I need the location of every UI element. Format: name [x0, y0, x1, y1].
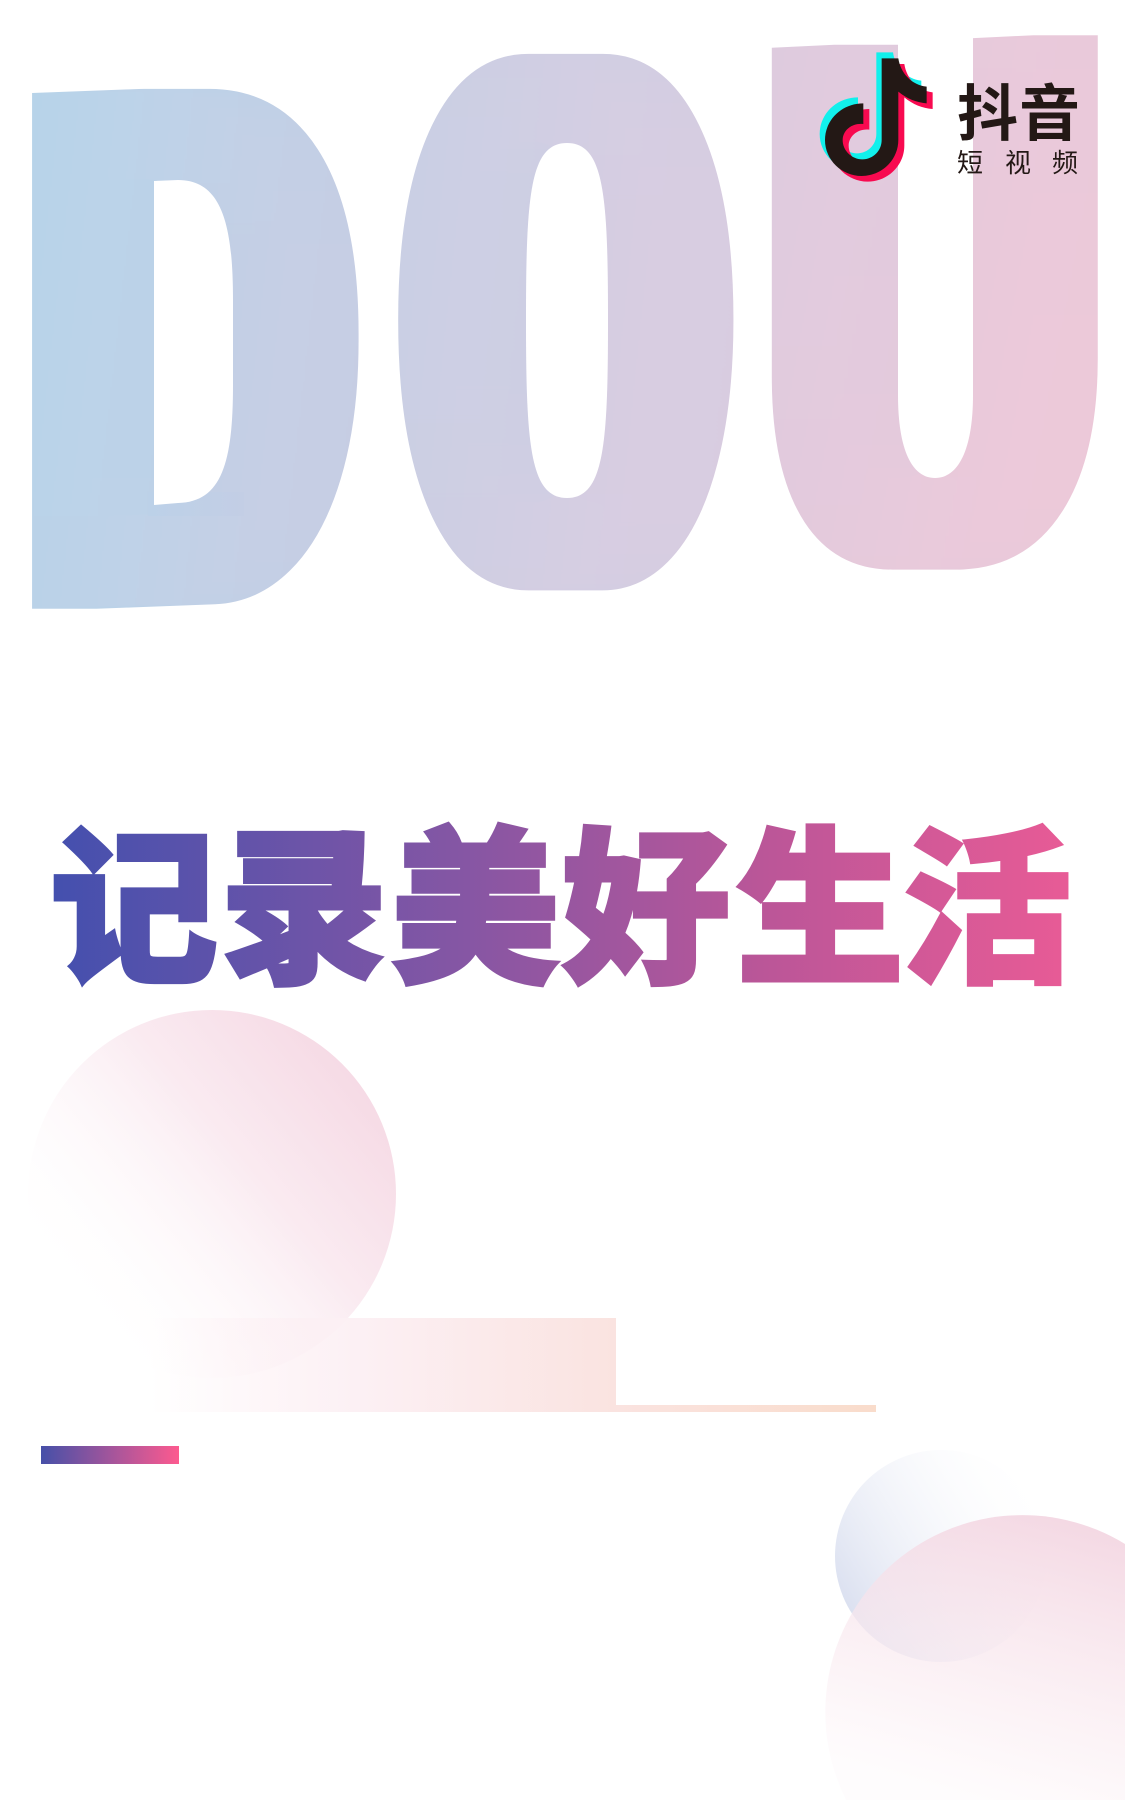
decorative line [616, 1405, 876, 1412]
decorative rectangle [150, 1318, 616, 1412]
icon: music note [820, 52, 933, 182]
logo subtitle: 短视频 [957, 148, 1078, 178]
decorative circle: blue [835, 1450, 1047, 1662]
gradient accent bar [41, 1446, 179, 1464]
logo wordmark: 抖音 [957, 80, 1080, 148]
decorative circle: pink [825, 1515, 1125, 1800]
decorative circle: left [28, 1010, 396, 1378]
title: 记录美好生活 [50, 817, 1071, 1005]
logo: douyin [820, 52, 1080, 182]
